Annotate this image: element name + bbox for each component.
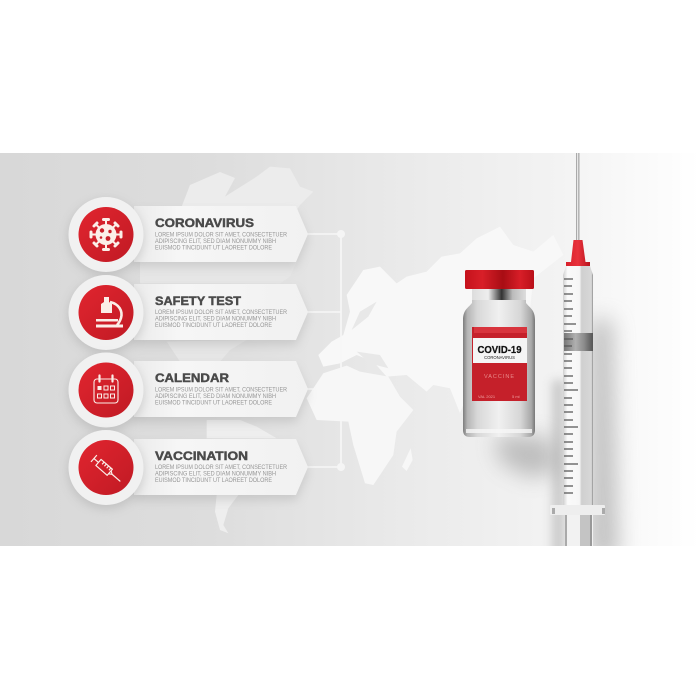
body text: ADIPISCING ELIT, SED DIAM NONUMMY NIBH [155, 316, 276, 322]
label: batch info: VAL 2021 [478, 394, 496, 399]
infographic canvas [0, 153, 636, 546]
syringe [550, 153, 618, 560]
body text [155, 310, 288, 329]
heading: CORONAVIRUS [155, 216, 254, 230]
panel: safety test [68, 275, 308, 354]
body text [155, 465, 288, 484]
panel: coronavirus [68, 197, 308, 276]
map: canada [140, 262, 297, 362]
body text [155, 232, 288, 252]
panel: calendar [68, 352, 308, 432]
heading: SAFETY TEST [155, 294, 242, 308]
barrel ring [564, 333, 593, 351]
circle badge [68, 430, 144, 509]
banner [134, 212, 308, 267]
panel: vaccination [68, 430, 308, 509]
connector dot top [337, 230, 345, 238]
heading: CALENDAR [155, 371, 229, 385]
body text: LOREM IPSUM DOLOR SIT AMET, CONSECTETUER [155, 465, 288, 471]
label: coronavirus: CORONAVIRUS [484, 355, 515, 360]
plunger [565, 515, 593, 546]
icon: microscope [96, 297, 123, 328]
icon: calendar [94, 376, 118, 403]
body text: EUISMOD TINCIDUNT UT LAOREET DOLORE [155, 323, 272, 329]
vial cap [465, 270, 534, 289]
body text: EUISMOD TINCIDUNT UT LAOREET DOLORE [155, 478, 272, 484]
vial shadow [495, 436, 560, 478]
vial body [463, 299, 535, 437]
icon: syringe [91, 455, 123, 485]
flange ends [552, 508, 605, 514]
map: madagascar [402, 448, 413, 471]
connector dot bottom [337, 463, 345, 471]
banner [134, 290, 308, 345]
label: volume: 5 ml [512, 394, 520, 399]
label white panel [473, 338, 527, 363]
body text: EUISMOD TINCIDUNT UT LAOREET DOLORE [155, 246, 272, 252]
needle [576, 153, 580, 241]
map: africa [307, 366, 413, 485]
connector lines [305, 230, 345, 471]
map: south america [207, 420, 277, 533]
finger flange [550, 505, 605, 515]
label: vaccine: VACCINE [484, 374, 515, 380]
body text: LOREM IPSUM DOLOR SIT AMET, CONSECTETUER [155, 232, 288, 238]
circle badge [68, 352, 144, 432]
body text: ADIPISCING ELIT, SED DIAM NONUMMY NIBH [155, 394, 276, 400]
body text: EUISMOD TINCIDUNT UT LAOREET DOLORE [155, 400, 272, 406]
body text: ADIPISCING ELIT, SED DIAM NONUMMY NIBH [155, 239, 276, 245]
barrel [563, 266, 593, 505]
map: eurasia [318, 227, 563, 413]
circle badge [68, 275, 144, 354]
map: inland seas [352, 302, 388, 368]
body text: LOREM IPSUM DOLOR SIT AMET, CONSECTETUER [155, 310, 288, 316]
vial neck [472, 289, 526, 300]
body text [155, 388, 288, 406]
world map [140, 167, 563, 533]
needle hub [566, 240, 590, 266]
label: covid-19: COVID-19 [478, 345, 522, 356]
circle badge [68, 197, 144, 276]
icon: virus [91, 220, 121, 250]
syringe shadow [552, 320, 618, 560]
vial [463, 270, 560, 478]
tick marks [564, 279, 578, 493]
banner [134, 445, 308, 500]
heading: VACCINATION [155, 449, 248, 463]
background band [0, 153, 700, 546]
body text: LOREM IPSUM DOLOR SIT AMET, CONSECTETUER [155, 388, 288, 394]
vial label [472, 327, 527, 401]
body text: ADIPISCING ELIT, SED DIAM NONUMMY NIBH [155, 472, 276, 478]
map: north america and greenland [181, 167, 313, 215]
banner [134, 367, 308, 422]
